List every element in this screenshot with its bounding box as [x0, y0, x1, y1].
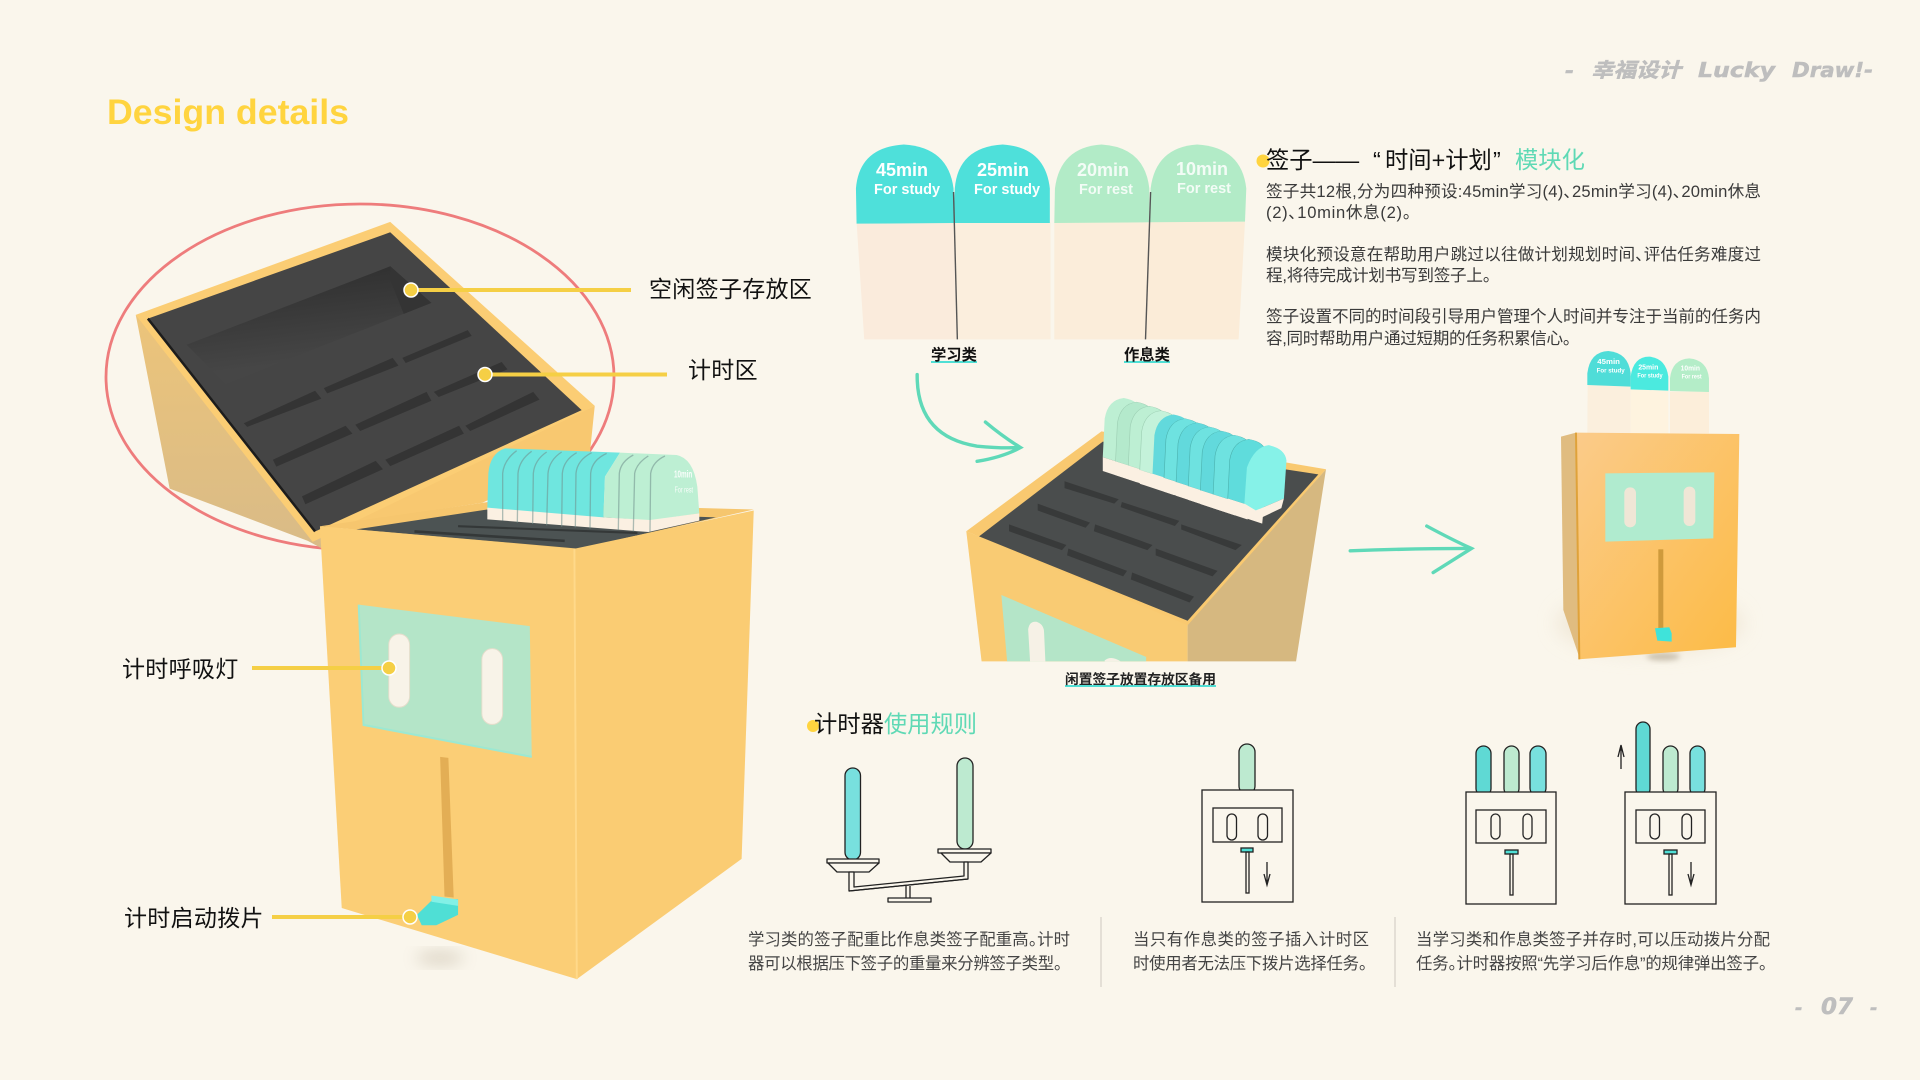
stick labels: For rest	[1177, 181, 1231, 197]
floor shadow	[416, 952, 464, 964]
text block: stick description: 程,将待完成计划书写到签子上。	[1266, 266, 1491, 285]
text block: stick description: 模块化预设意在帮助用户跳过以往做计划规划时间、评估任务难度过	[1266, 245, 1761, 264]
callout: idle stick storage	[404, 276, 812, 302]
three inserted sticks: For study	[1597, 367, 1625, 374]
stick heads	[856, 144, 1246, 224]
breathing light window	[359, 605, 532, 757]
arrow: straight to finished box	[1350, 526, 1471, 573]
sticks resting in timing zone: For rest	[675, 486, 693, 495]
callout: timing zone	[478, 357, 758, 383]
heading: sticks modular	[1256, 147, 1585, 173]
callout: idle stick storage: 空闲签子存放区	[649, 276, 812, 302]
header brand line: Lucky	[1698, 58, 1776, 82]
stick bodies	[857, 222, 1245, 339]
window	[1605, 472, 1714, 542]
start lever	[417, 895, 458, 925]
header brand line	[1565, 58, 1873, 82]
heading: timer usage rules: 计时器使用规则	[814, 711, 977, 737]
idle stick storage recess	[187, 266, 431, 384]
three inserted sticks: For rest	[1682, 373, 1702, 380]
heading: sticks modular: ”	[1493, 147, 1501, 173]
header brand line: -	[1565, 60, 1574, 82]
heading: sticks modular: 模块化	[1515, 147, 1585, 173]
timing zone slots	[244, 330, 539, 504]
text block: rest-only rule: 时使用者无法压下拨片选择任务。	[1133, 955, 1367, 973]
caption: idle sticks: 闲置签子放置存放区备用	[1065, 671, 1216, 687]
left tray	[827, 859, 879, 872]
right tray	[938, 849, 991, 862]
box front face	[320, 526, 577, 979]
stick labels: For study	[974, 182, 1040, 198]
stick labels: For rest	[1079, 182, 1133, 198]
stick labels: For study	[874, 182, 940, 198]
main product: timer box with open lid	[122, 222, 812, 979]
sticks resting in timing zone	[487, 448, 699, 532]
header brand line: Draw!-	[1792, 58, 1873, 82]
three inserted sticks: 10min	[1681, 366, 1700, 373]
diagram: mixed sticks, study stick ejected	[1618, 722, 1716, 904]
text block: balance rule: 器可以根据压下签子的重量来分辨签子类型。	[748, 955, 1062, 973]
tray slots	[1009, 481, 1242, 603]
page number	[1795, 995, 1877, 1020]
text block: stick description	[1266, 182, 1761, 348]
text block: stick description: 容,同时帮助用户通过短期的任务积累信心。	[1266, 329, 1571, 348]
right tan wall	[1188, 469, 1326, 661]
stick separators	[954, 192, 1151, 339]
lid: sloped storage tray	[136, 222, 595, 549]
diagram: mixed sticks, before	[1466, 746, 1556, 904]
text block: balance rule	[748, 931, 1070, 973]
middle product: tilted box with sticks	[966, 398, 1326, 661]
twelve parked sticks	[1103, 398, 1286, 524]
finished product: box with three sticks	[1557, 351, 1743, 661]
stick labels	[874, 159, 1231, 198]
front yellow wall	[966, 531, 1188, 661]
rim	[966, 431, 1326, 625]
three inserted sticks: 25min	[1638, 364, 1658, 371]
callout: start lever: 计时启动拨片	[124, 905, 264, 931]
front face	[1576, 433, 1739, 659]
title: Design details	[107, 93, 349, 132]
three inserted sticks	[1587, 351, 1709, 433]
callout: start lever	[124, 905, 417, 931]
text block: mixed rule: 任务。计时器按照“先学习后作息”的规律弹出签子。	[1416, 955, 1767, 973]
text block: stick description: (2)、10min休息(2)。	[1266, 203, 1411, 222]
lever	[1655, 627, 1672, 642]
callout: breathing light	[122, 656, 396, 682]
stick labels: 25min	[977, 160, 1029, 180]
stick labels: 45min	[876, 160, 928, 180]
side face	[1561, 433, 1580, 659]
lever slot	[440, 757, 454, 898]
text block: mixed rule	[1416, 931, 1770, 973]
diagram: balance	[827, 758, 991, 902]
three inserted sticks: For study	[1637, 372, 1663, 379]
sticks resting in timing zone: 10min	[674, 469, 692, 480]
page number: 07	[1821, 995, 1854, 1020]
category label: study: 学习类	[931, 346, 977, 364]
heading: sticks modular: “	[1373, 147, 1381, 173]
page number: -	[1870, 998, 1877, 1019]
category label: rest: 作息类	[1124, 346, 1170, 364]
window, partly cropped	[1001, 595, 1146, 661]
diagram: rest stick only	[1202, 744, 1293, 902]
beam and base	[849, 862, 968, 902]
box back rim and interior	[320, 502, 754, 550]
floor shadow	[1557, 593, 1743, 653]
callout: timing zone: 计时区	[688, 357, 758, 383]
page number: -	[1795, 998, 1802, 1019]
heavier study stick	[845, 768, 860, 860]
text block: mixed rule: 当学习类和作息类签子并存时,可以压动拨片分配	[1416, 931, 1770, 949]
slot	[1658, 549, 1663, 628]
text block: rest-only rule	[1133, 931, 1369, 973]
highlight ellipse around lid	[106, 204, 614, 550]
callout: breathing light: 计时呼吸灯	[122, 656, 238, 682]
lighter rest stick	[957, 758, 973, 849]
box right face	[574, 511, 754, 979]
stick labels: 20min	[1077, 160, 1129, 180]
down arrow	[1264, 862, 1270, 885]
panel: four stick presets	[856, 144, 1246, 364]
arrow: curved to open box	[917, 375, 1020, 461]
down arrow	[1688, 862, 1694, 885]
stick labels: 10min	[1176, 159, 1228, 179]
heading: sticks modular: 签子——	[1266, 147, 1360, 173]
text block: balance rule: 学习类的签子配重比作息类签子配重高。计时	[748, 931, 1070, 949]
header brand line: 幸福设计	[1591, 58, 1684, 82]
heading: sticks modular: 时间+计划	[1385, 147, 1492, 173]
three inserted sticks: 45min	[1597, 359, 1620, 366]
text block: rest-only rule: 当只有作息类的签子插入计时区	[1133, 931, 1369, 949]
text block: stick description: 签子设置不同的时间段引导用户管理个人时间并专注于当前的任务内	[1266, 307, 1761, 326]
dark tray	[979, 442, 1318, 621]
text block: stick description: 签子共12根,分为四种预设:45min学习(4)、25min学习(4)、20min休息	[1266, 182, 1761, 201]
up arrow	[1618, 745, 1624, 769]
